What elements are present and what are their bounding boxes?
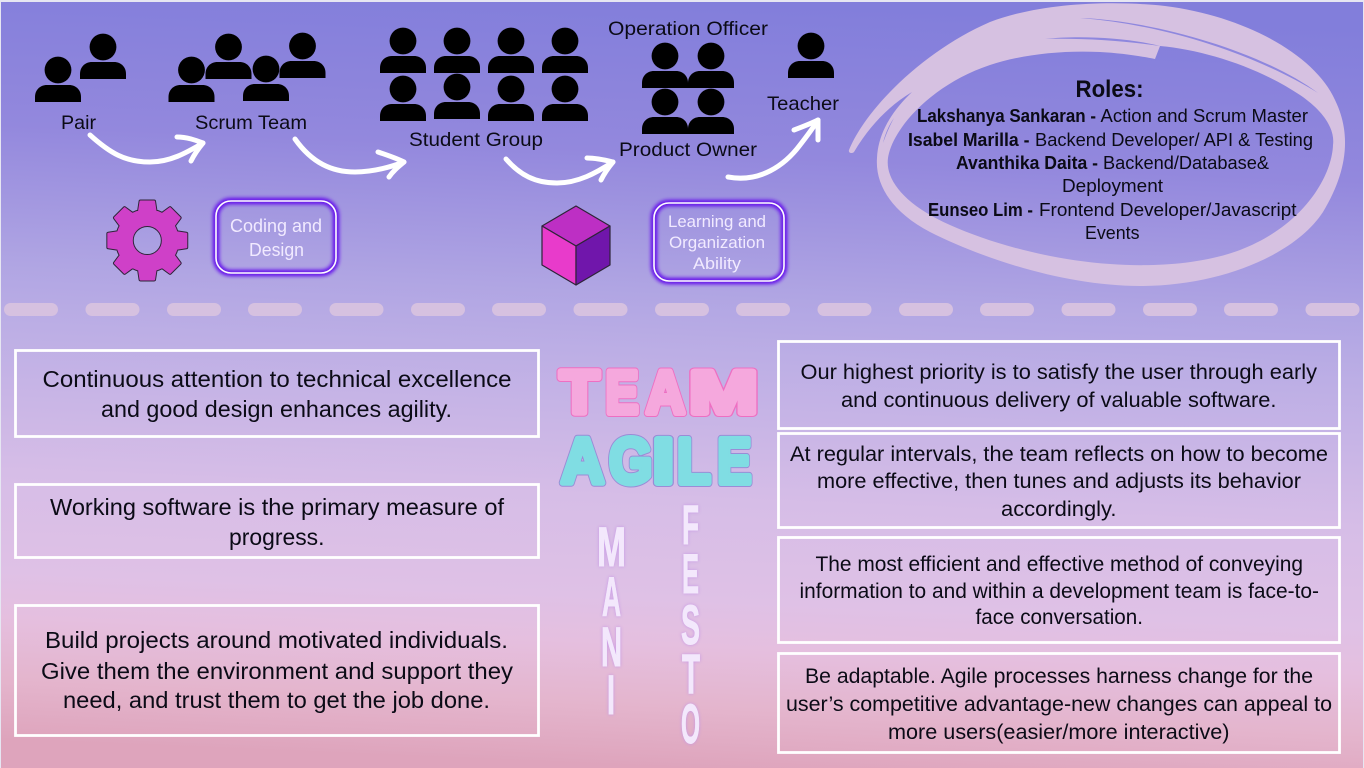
principle box: working software: Working software is the primary measure of bbox=[50, 494, 504, 520]
principle box: technical excellence bbox=[16, 350, 538, 436]
org flow: pair: Pair bbox=[61, 112, 97, 134]
title: team: M bbox=[689, 359, 758, 426]
title: festo: T bbox=[682, 642, 700, 705]
arrow: pair to scrum team bbox=[90, 135, 203, 162]
title: agile: E bbox=[717, 425, 751, 497]
dashed divider bbox=[4, 303, 1360, 316]
principle box: technical excellence: Continuous attention to technical excellence bbox=[42, 366, 512, 392]
principle box: satisfy the user: Our highest priority is to satisfy the user through early bbox=[800, 361, 1318, 384]
principle box: motivated individuals: Give them the environment and support they bbox=[41, 658, 513, 684]
title: agile: L bbox=[677, 425, 711, 497]
title: agile: A bbox=[561, 425, 604, 497]
icon: gear bbox=[108, 202, 186, 280]
org flow: operation officer and product owner bbox=[608, 18, 769, 161]
org flow: teacher: Teacher bbox=[767, 93, 840, 115]
org flow: scrum team bbox=[168, 33, 326, 134]
title: agile: E bbox=[717, 425, 751, 497]
principle box: motivated individuals: Build projects around motivated individuals. bbox=[45, 627, 508, 653]
principle box: satisfy the user bbox=[778, 342, 1340, 428]
principle box: be adaptable bbox=[778, 654, 1340, 752]
panel: roles: Avanthika Daita - bbox=[956, 152, 1098, 173]
skill box: learning and organization ability: Ability bbox=[693, 254, 742, 273]
panel: roles: Backend Developer/ API & Testing bbox=[1035, 129, 1313, 150]
skill box: learning and organization ability: Learning and bbox=[668, 212, 766, 231]
title: agile: A bbox=[561, 425, 604, 497]
title: mani bbox=[597, 515, 626, 726]
principle box: face-to-face conversation: face conversation. bbox=[976, 606, 1143, 629]
arrow: student group to product owner bbox=[506, 158, 613, 183]
principle box: technical excellence: and good design enhances agility. bbox=[101, 396, 452, 422]
panel: roles: Deployment bbox=[1062, 175, 1163, 196]
panel: roles: Frontend Developer/Javascript bbox=[1039, 199, 1296, 220]
title: agile: G bbox=[609, 425, 652, 497]
skill box: learning and organization ability: Organization bbox=[669, 233, 765, 252]
panel: roles: Lakshanya Sankaran - bbox=[917, 105, 1096, 126]
org flow: operation officer and product owner: Operation Officer bbox=[608, 18, 769, 40]
arrow: scrum team to student group bbox=[295, 139, 404, 177]
title: festo: F bbox=[682, 493, 699, 556]
org flow: pair bbox=[35, 34, 126, 134]
org flow: student group: Student Group bbox=[409, 129, 543, 151]
title: team: A bbox=[646, 359, 685, 426]
arrow: product owner to teacher bbox=[728, 120, 818, 178]
principle box: face-to-face conversation: The most efficient and effective method of conveying bbox=[816, 553, 1303, 576]
principle box: satisfy the user: and continuous delivery of valuable software. bbox=[841, 389, 1276, 412]
panel: roles: Backend/Database& bbox=[1103, 152, 1270, 173]
principle box: be adaptable: more users(easier/more interactive) bbox=[888, 721, 1230, 744]
principle box: working software bbox=[16, 484, 538, 558]
title: team: M bbox=[689, 359, 758, 426]
title: agile: L bbox=[677, 425, 711, 497]
title: mani: A bbox=[602, 565, 621, 628]
icon: cube bbox=[542, 206, 610, 285]
skill box: coding and design: Design bbox=[249, 240, 304, 260]
title: mani: I bbox=[607, 663, 615, 726]
org flow: operation officer and product owner: Product Owner bbox=[619, 139, 758, 161]
principle box: regular reflection: accordingly. bbox=[1001, 498, 1116, 521]
panel: roles: Isabel Marilla - bbox=[908, 129, 1030, 150]
title: festo bbox=[681, 493, 700, 755]
skill box: coding and design: Coding and bbox=[230, 216, 322, 236]
principle box: working software: progress. bbox=[229, 524, 324, 550]
org flow: student group bbox=[380, 28, 588, 151]
title: team: T bbox=[560, 359, 599, 426]
skill box: learning and organization ability bbox=[654, 203, 784, 281]
principle box: motivated individuals bbox=[16, 606, 538, 736]
panel: roles: Roles: bbox=[1076, 76, 1144, 103]
infographic canvas: O bbox=[681, 692, 700, 755]
principle box: face-to-face conversation: information to and within a development team is face-to- bbox=[800, 580, 1319, 603]
skill box: coding and design bbox=[216, 201, 336, 273]
hand drawn ellipse around roles bbox=[849, 3, 1345, 286]
title: mani: N bbox=[601, 615, 622, 678]
title: team: E bbox=[606, 359, 638, 426]
org flow: scrum team: Scrum Team bbox=[195, 112, 307, 134]
org flow: teacher bbox=[767, 33, 840, 115]
title: agile: G bbox=[609, 425, 652, 497]
title: mani: M bbox=[597, 515, 626, 578]
principle box: motivated individuals: need, and trust them to get the job done. bbox=[63, 687, 490, 713]
panel: roles: Action and Scrum Master bbox=[1100, 105, 1308, 126]
title: agile: I bbox=[652, 425, 674, 497]
principle box: regular reflection: At regular intervals, the team reflects on how to become bbox=[790, 443, 1328, 466]
panel: roles: Events bbox=[1085, 222, 1140, 243]
title: team: A bbox=[646, 359, 685, 426]
principle box: be adaptable: user’s competitive advantage-new changes can appeal to bbox=[786, 693, 1332, 716]
panel: roles bbox=[908, 76, 1313, 243]
title: agile: I bbox=[652, 425, 674, 497]
title: team: T bbox=[560, 359, 599, 426]
title: team: E bbox=[606, 359, 638, 426]
title: festo: S bbox=[681, 593, 700, 656]
principle box: face-to-face conversation bbox=[778, 538, 1340, 642]
infographic canvas: E bbox=[682, 542, 699, 605]
title: agile bbox=[561, 425, 751, 497]
principle box: be adaptable: Be adaptable. Agile processes harness change for the bbox=[805, 665, 1313, 688]
title: team bbox=[560, 359, 758, 426]
principle box: regular reflection bbox=[778, 434, 1340, 528]
principle box: regular reflection: more effective, then tunes and adjusts its behavior bbox=[817, 470, 1301, 493]
panel: roles: Eunseo Lim - bbox=[928, 199, 1033, 220]
